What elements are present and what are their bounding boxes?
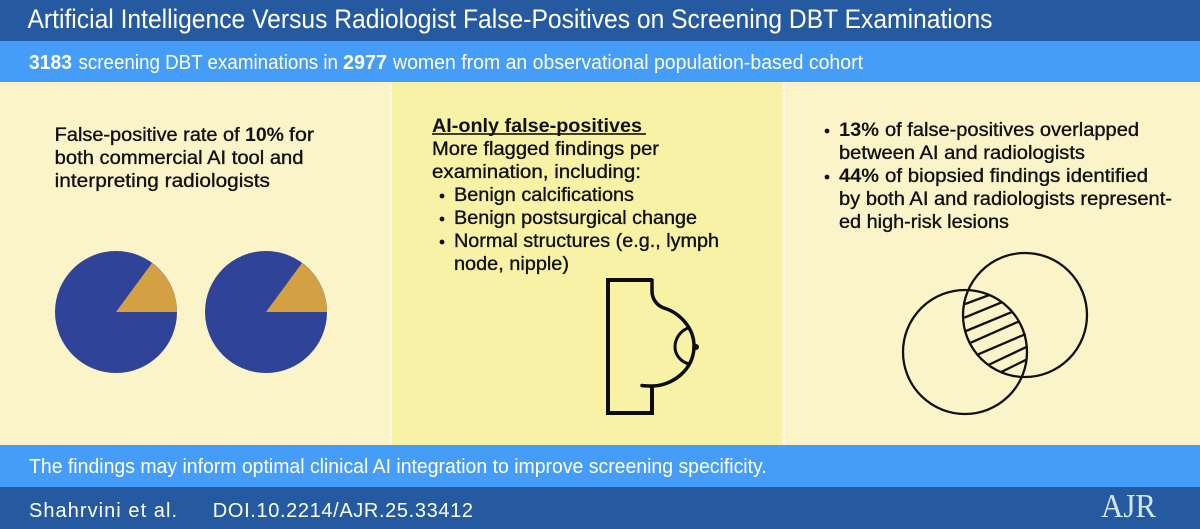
overlap bullet text: 44% <box>839 166 879 187</box>
DOI: DOI.10.2214/AJR.25.33412 <box>213 500 473 522</box>
false-positive rate text: for <box>289 125 315 146</box>
overlap bullet text: 13% <box>839 120 879 141</box>
AI-only description: examination, including: <box>432 162 641 183</box>
bullet list of finding types: Benign calcifications <box>454 185 634 206</box>
venn diagram <box>903 253 1087 414</box>
panel: false-positive rate <box>0 82 390 445</box>
title: Artificial Intelligence Versus Radiologist False-Positives on Screening DBT Examinations <box>28 4 992 34</box>
footer band <box>0 487 1200 529</box>
study population band <box>0 41 1200 82</box>
study population band: women from an observational population-based cohort <box>392 52 863 74</box>
study population band: 2977 <box>343 52 387 74</box>
overlap bullet text: between AI and radiologists <box>839 143 1085 164</box>
overlap bullet text <box>825 120 1172 233</box>
pie chart: radiologists <box>205 251 327 373</box>
study population band: screening DBT examinations in <box>78 52 338 74</box>
false-positive rate text <box>55 125 315 192</box>
bullet list of finding types <box>440 185 719 275</box>
false-positive rate text: 10% <box>245 125 284 146</box>
panel: overlap findings <box>785 82 1200 445</box>
false-positive rate text: both commercial AI tool and <box>55 148 304 169</box>
bullet list of finding types: node, nipple) <box>454 254 569 275</box>
icon: breast outline <box>608 280 699 413</box>
overlap bullet text: ed high-risk lesions <box>839 212 1009 233</box>
conclusion band <box>0 445 1200 487</box>
overlap bullet text: of false-positives overlapped <box>885 120 1139 141</box>
false-positive rate text: False-positive rate of <box>55 125 240 146</box>
citation: Shahrvini et al. <box>29 500 177 522</box>
panel: AI-only false-positives <box>392 82 782 445</box>
title band <box>0 0 1200 41</box>
AI-only description <box>432 139 660 183</box>
bullet list of finding types: Normal structures (e.g., lymph <box>454 231 719 252</box>
AI-only description: More flagged findings per <box>432 139 660 160</box>
bullet list of finding types: Benign postsurgical change <box>454 208 697 229</box>
overlap bullet text: by both AI and radiologists represent- <box>839 189 1172 210</box>
pie chart: AI tool <box>55 251 177 373</box>
overlap bullet text: of biopsied findings identified <box>885 166 1148 187</box>
AI-only heading: AI-only false-positives <box>432 116 642 137</box>
false-positive rate text: interpreting radiologists <box>55 171 270 192</box>
conclusion band: The findings may inform optimal clinical AI integration to improve screening specificity. <box>29 456 767 478</box>
AJR logo: AJR <box>1101 488 1156 525</box>
study population band: 3183 <box>29 52 72 74</box>
